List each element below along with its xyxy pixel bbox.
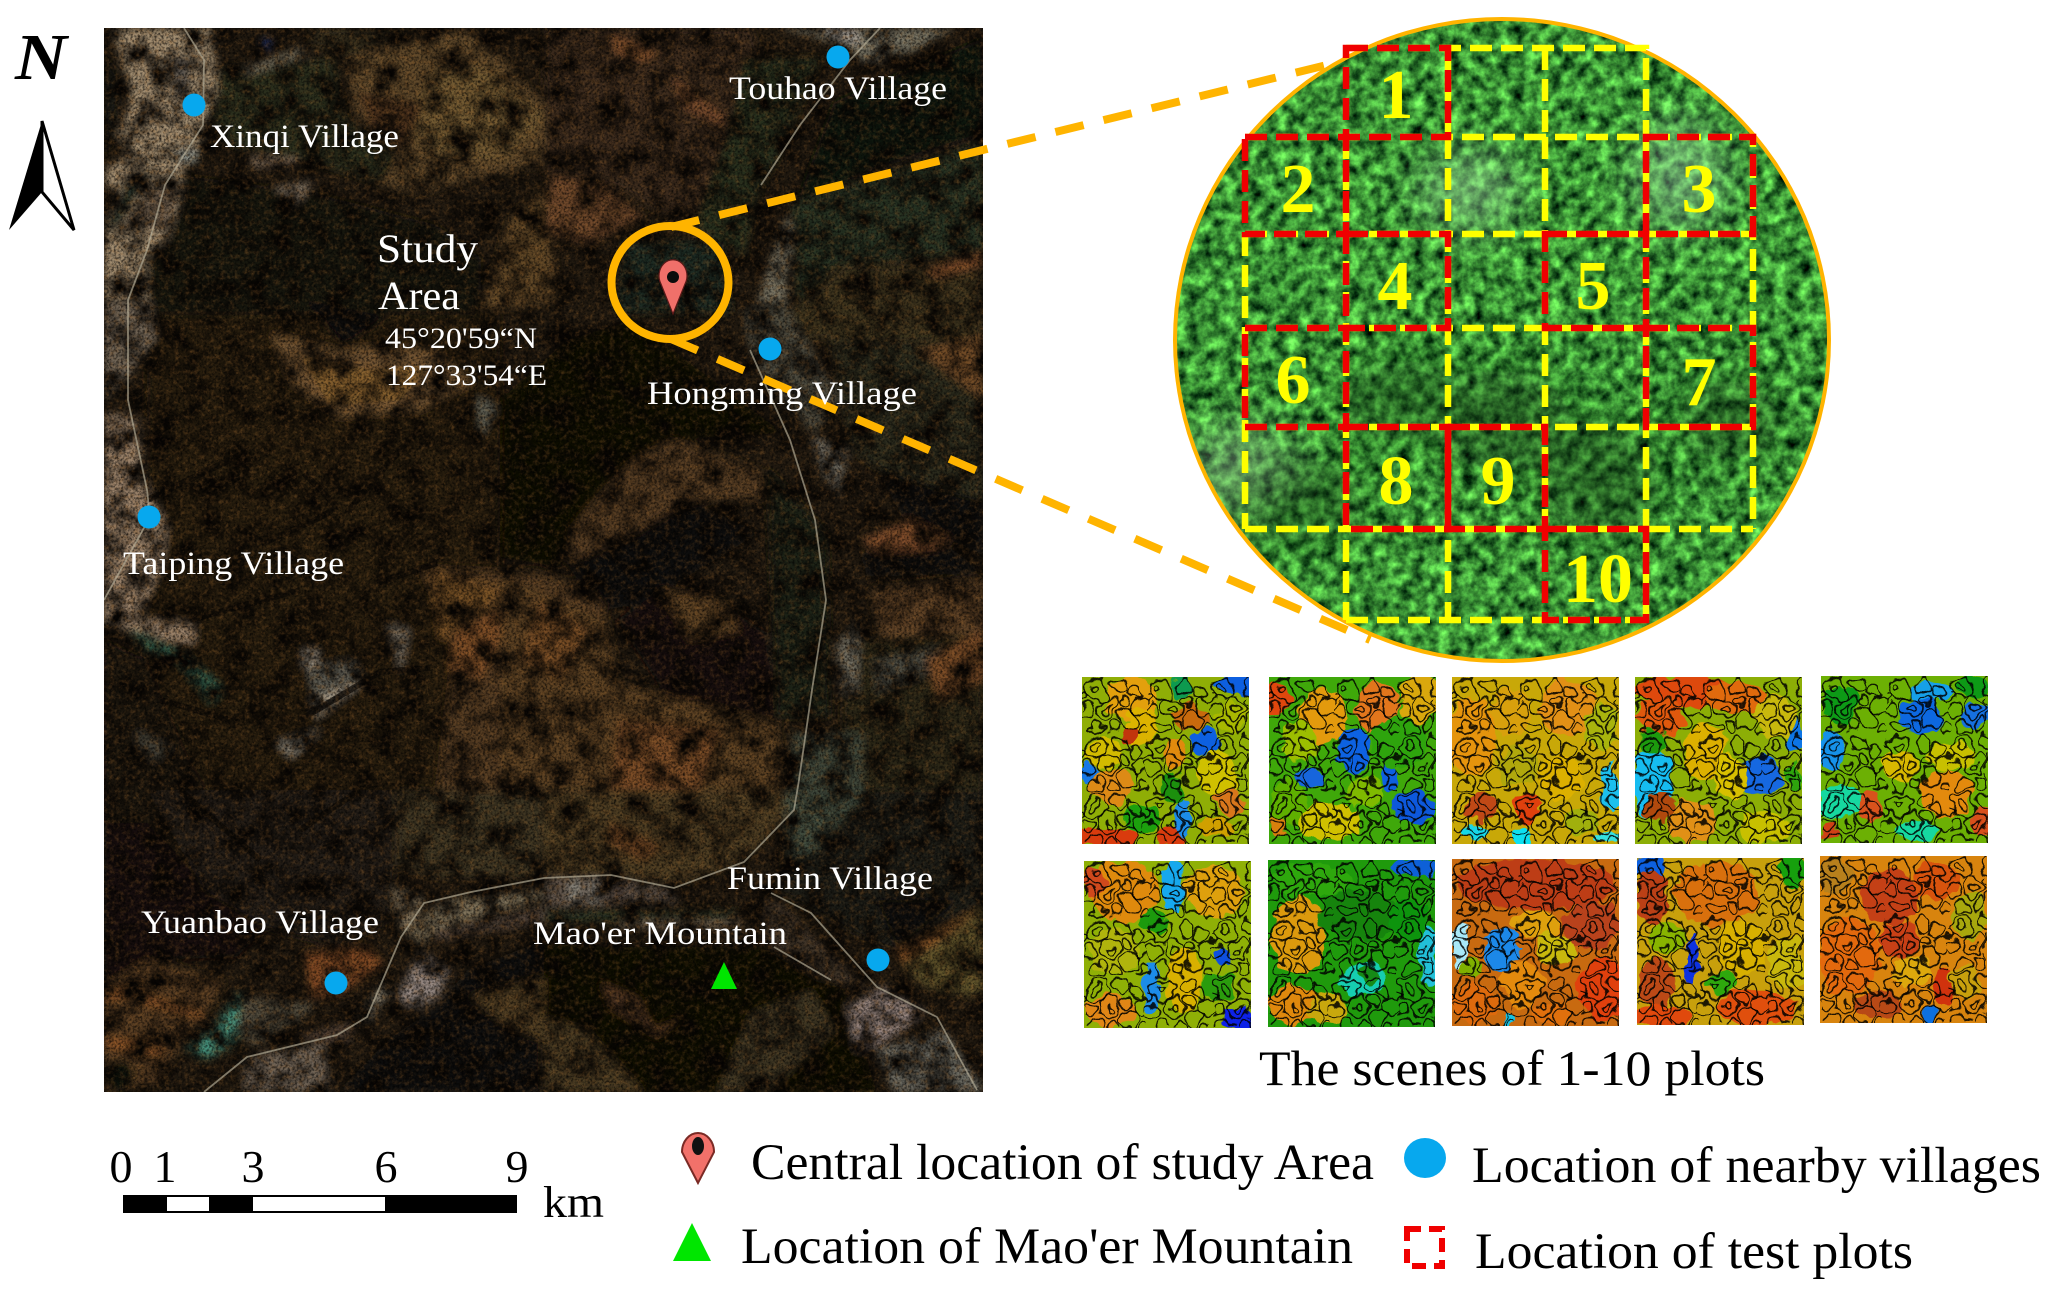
- map label: study area: [377, 226, 547, 392]
- plot numbers: 6: [1276, 342, 1310, 419]
- plot scene 2: [1265, 675, 1439, 844]
- plot numbers: 4: [1378, 248, 1412, 325]
- map label: Fumin Village: [727, 861, 933, 972]
- scale bar: [110, 1141, 604, 1227]
- legend: nearby villages: Location of nearby villages: [1472, 1138, 2041, 1194]
- terrain: central ridges: [104, 298, 983, 826]
- map warm speckle: [104, 28, 983, 1092]
- crown outlines: [1637, 858, 1804, 1025]
- map label: Hongming Village: Hongming Village: [647, 376, 917, 412]
- scale bar: 9: [506, 1141, 528, 1192]
- map label: Mao'er Mountain: [533, 916, 787, 989]
- crown outlines: [1452, 859, 1619, 1026]
- crown outlines: [1635, 677, 1802, 844]
- plot scene 10: [1819, 856, 1988, 1028]
- crown outlines: [1821, 676, 1988, 843]
- plot scene 6: [1083, 860, 1255, 1031]
- plot numbers: 10: [1563, 541, 1633, 618]
- crown outlines: [1082, 677, 1249, 844]
- legend: central location: Central location of study Area: [751, 1135, 1374, 1191]
- dashed zoom line: upper: [671, 61, 1343, 227]
- scale bar: 1: [154, 1141, 176, 1192]
- caption: The scenes of 1-10 plots: [1259, 1040, 1765, 1096]
- plot scene 3: [1448, 677, 1620, 849]
- scale bar: 0: [110, 1141, 132, 1192]
- map grain: [104, 28, 983, 1092]
- map mottling: [104, 28, 983, 1092]
- roads: [104, 28, 977, 1092]
- dashed zoom line: lower: [671, 339, 1370, 640]
- map label: Yuanbao Village: [141, 905, 379, 994]
- plot numbers: [1276, 57, 1716, 618]
- ridge lines: [144, 400, 437, 860]
- map label: Fumin Village: Fumin Village: [727, 861, 933, 897]
- legend: Mao'er Mountain: Location of Mao'er Mountain: [741, 1219, 1353, 1275]
- plot scene 7: [1267, 859, 1438, 1027]
- plot scene 5: [1817, 676, 1992, 843]
- map label: Taiping Village: [123, 506, 344, 582]
- map label: study area: 127°33'54“E: [386, 359, 547, 392]
- zoomed forest circle: [1170, 15, 1840, 665]
- study area circle on map: [612, 226, 728, 339]
- map label: Yuanbao Village: Yuanbao Village: [141, 905, 379, 941]
- icon: north N: N: [14, 21, 70, 94]
- crown outlines: [1269, 677, 1436, 844]
- plot numbers: 9: [1480, 443, 1516, 520]
- map label: Xinqi Village: Xinqi Village: [210, 119, 399, 155]
- scale bar: 3: [242, 1141, 264, 1192]
- plot scene 8: [1450, 859, 1626, 1027]
- map label: Touhao Village: [729, 46, 947, 107]
- terrain: southern valley and mountain: [104, 790, 983, 1092]
- map label: Taiping Village: Taiping Village: [123, 546, 344, 582]
- map label: Mao'er Mountain: Mao'er Mountain: [533, 916, 787, 952]
- red test plots: [1245, 48, 1753, 620]
- icon: north arrow: [9, 121, 74, 230]
- map label: study area: Area: [378, 273, 460, 318]
- plot scene 9: [1631, 856, 1805, 1028]
- plot numbers: 7: [1682, 344, 1716, 421]
- plot numbers: 3: [1682, 151, 1716, 228]
- map label: study area: Study: [377, 226, 478, 271]
- map label: Hongming Village: [647, 338, 917, 412]
- plot numbers: 1: [1378, 57, 1414, 134]
- crown outlines: [1084, 861, 1251, 1028]
- crown outlines: [1452, 677, 1619, 844]
- plot numbers: 5: [1576, 248, 1610, 325]
- crown outlines: [1268, 860, 1435, 1027]
- plot numbers: 2: [1280, 151, 1316, 228]
- icon: study area pin: [659, 260, 687, 314]
- plot numbers: 8: [1378, 443, 1414, 520]
- crown outlines: [1820, 856, 1987, 1023]
- map label: Xinqi Village: [182, 94, 399, 155]
- yellow grid lines: [1245, 48, 1753, 620]
- plot scene 4: [1633, 675, 1805, 844]
- plot grid: [1245, 48, 1753, 620]
- plot scene 1: [1082, 677, 1249, 844]
- satellite map: [104, 28, 983, 1092]
- legend: test plots: Location of test plots: [1475, 1224, 1913, 1280]
- scale bar: km: [543, 1178, 604, 1227]
- map label: study area: 45°20'59“N: [385, 322, 537, 355]
- map label: Touhao Village: Touhao Village: [729, 71, 947, 107]
- scale bar: 6: [374, 1141, 398, 1192]
